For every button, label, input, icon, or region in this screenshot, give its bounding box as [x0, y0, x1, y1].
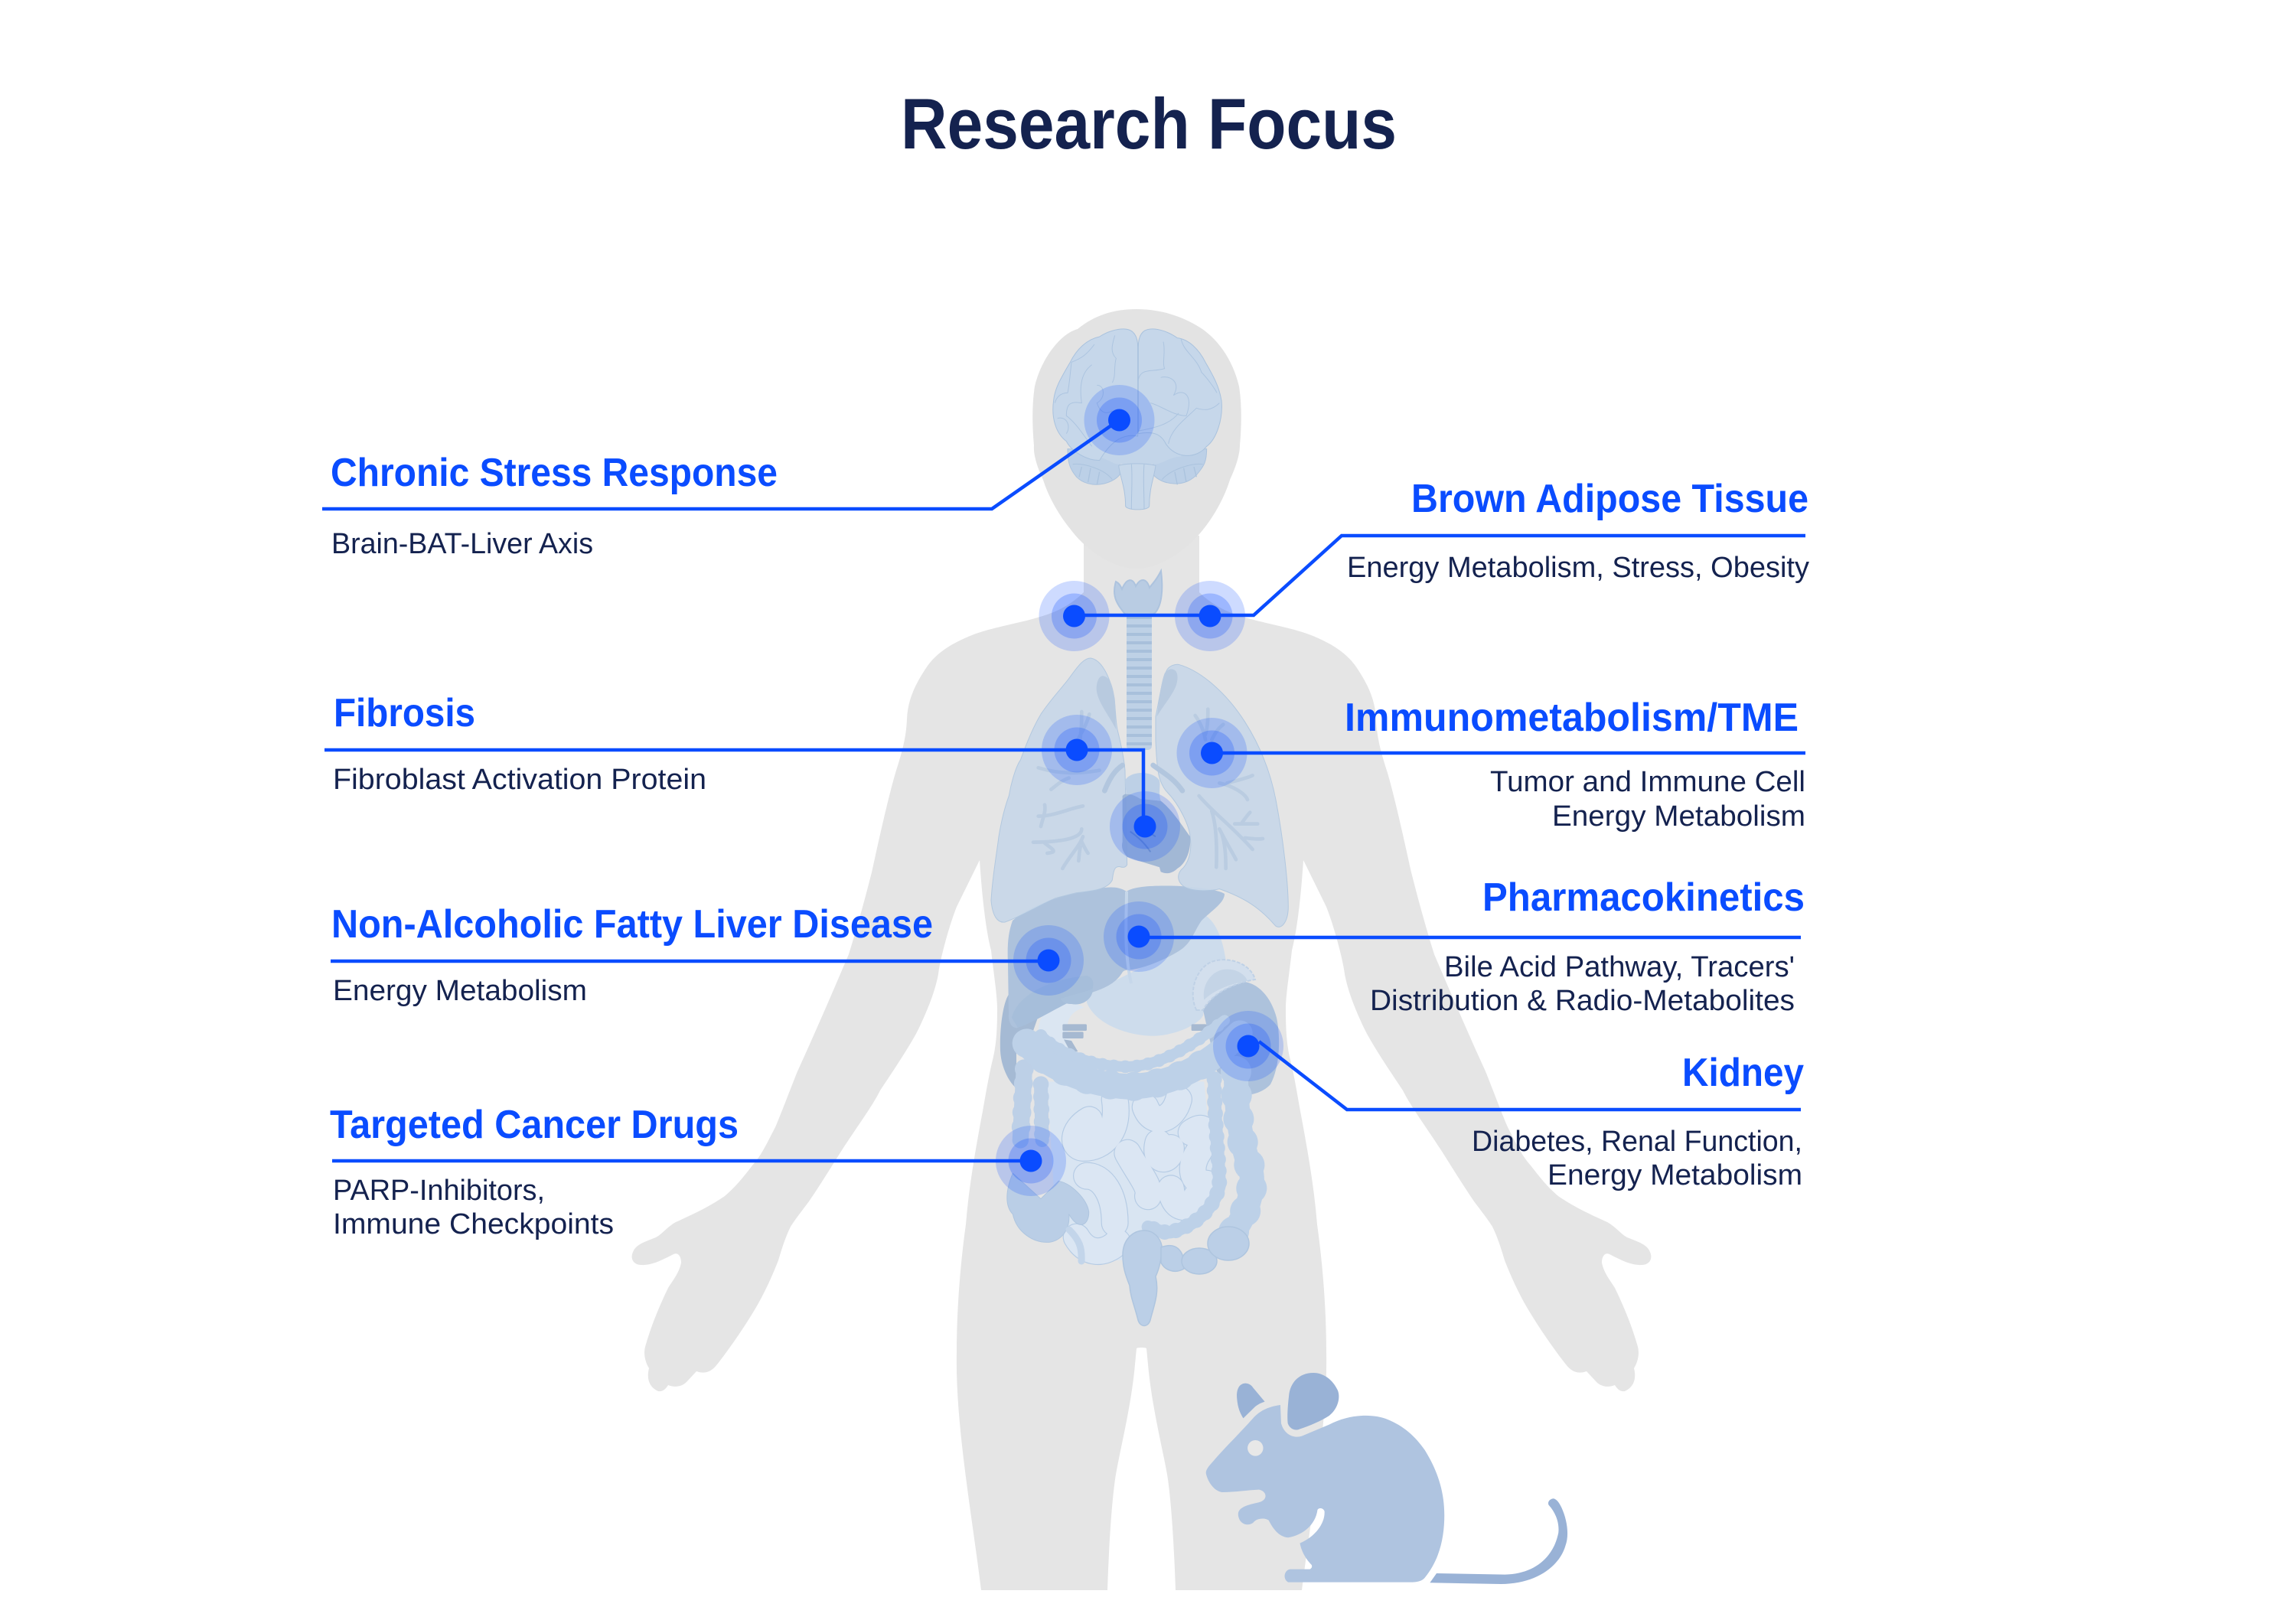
human body silhouette: [632, 309, 1651, 1590]
heading: Targeted Cancer Drugs: [330, 1103, 739, 1147]
description: Fibroblast Activation Protein: [333, 764, 706, 796]
organ: heart and great vessels: [1104, 765, 1190, 873]
gallbladder: [1061, 989, 1093, 1005]
organ: larynx and trachea: [1114, 571, 1162, 750]
heading: Pharmacokinetics: [1482, 875, 1805, 920]
target marker: kidney: [1213, 1011, 1283, 1081]
organ: rectum and sigmoid colon: [1123, 1227, 1249, 1325]
description: Brain-BAT-Liver Axis: [331, 528, 593, 560]
mouse large ear: [1287, 1373, 1339, 1429]
description: Energy Metabolism, Stress, Obesity: [1347, 552, 1809, 584]
organ: brain: [1053, 329, 1221, 510]
description: Immune Checkpoints: [333, 1208, 614, 1240]
description: Diabetes, Renal Function,: [1472, 1126, 1802, 1158]
heading: Immunometabolism/TME: [1345, 696, 1799, 740]
brain gyri: [1055, 335, 1219, 446]
leader line: [1139, 936, 1801, 939]
right lung: [1156, 664, 1288, 927]
heading: Kidney: [1682, 1051, 1804, 1095]
description: Energy Metabolism: [1552, 800, 1805, 833]
leader line: [1212, 751, 1805, 755]
target marker: left lung: [1042, 715, 1112, 785]
ascending colon tubes: [1020, 1069, 1042, 1140]
heading: Fibrosis: [334, 691, 475, 735]
target marker: left neck: [1039, 581, 1110, 651]
organ: appendix: [1069, 1230, 1081, 1261]
leader line: [1075, 536, 1805, 615]
organ: pancreas: [1193, 960, 1255, 1010]
mouse small ear: [1237, 1384, 1265, 1418]
description: [1370, 951, 1795, 1017]
callout: pharmacokinetics: [1104, 875, 1805, 1017]
heading: Non-Alcoholic Fatty Liver Disease: [331, 902, 933, 947]
mouse eye: [1247, 1440, 1264, 1456]
callout: targeted cancer drugs: [330, 1103, 1066, 1240]
description: Energy Metabolism: [1548, 1159, 1802, 1191]
cerebral hemispheres: [1053, 329, 1221, 461]
target marker: right neck: [1175, 581, 1245, 651]
callout: immunometabolism: [1177, 696, 1805, 833]
leader line: [325, 750, 1143, 826]
description: [1490, 766, 1805, 833]
organ: small intestine: [1047, 1081, 1215, 1261]
target marker: brain: [1084, 385, 1154, 455]
callout: non-alcoholic fatty liver disease: [331, 902, 1084, 1007]
organ: liver: [1008, 886, 1225, 1028]
cecum: [1007, 1173, 1089, 1242]
bronchi: [1033, 709, 1263, 869]
organ: spleen and kidney shapes: [1000, 982, 1279, 1094]
lung inner lobes: [1097, 676, 1116, 729]
callout: brown adipose tissue: [1039, 477, 1809, 651]
description: Distribution & Radio-Metabolites: [1370, 985, 1795, 1017]
leader line: [1259, 1041, 1801, 1110]
organ: stomach: [1087, 912, 1228, 1036]
target marker: heart: [1110, 791, 1180, 862]
heading: Brown Adipose Tissue: [1411, 477, 1808, 521]
title: Research Focus: [901, 83, 1397, 164]
brain stem and cerebellum: [1068, 431, 1207, 510]
callout: kidney: [1213, 1011, 1804, 1191]
organ: lungs: [991, 658, 1288, 927]
description: [333, 1175, 614, 1240]
leader line: [331, 960, 1049, 963]
description: Tumor and Immune Cell: [1490, 766, 1805, 798]
description: [1472, 1126, 1802, 1191]
organ: colon: [1007, 1020, 1252, 1242]
transverse colon: [1027, 1020, 1240, 1087]
descending colon: [1148, 1071, 1252, 1237]
callout: fibrosis: [325, 691, 1180, 862]
organ: duodenum and vessels: [1039, 1000, 1207, 1051]
icon: mouse: [1206, 1373, 1567, 1584]
target marker: liver left lobe: [1104, 901, 1174, 972]
target marker: right lung: [1177, 718, 1247, 788]
leader line: [322, 420, 1119, 509]
mouse body: [1206, 1405, 1444, 1583]
target marker: colon: [996, 1126, 1066, 1196]
callout: chronic stress response: [322, 385, 1154, 560]
leader line: [332, 1159, 1031, 1162]
target marker: liver right lobe: [1013, 925, 1084, 996]
left lung: [991, 658, 1127, 922]
heading: Chronic Stress Response: [331, 451, 778, 495]
description: Bile Acid Pathway, Tracers': [1444, 951, 1795, 983]
description: Energy Metabolism: [333, 975, 587, 1007]
description: PARP-Inhibitors,: [333, 1175, 545, 1207]
mouse tail: [1430, 1498, 1567, 1584]
